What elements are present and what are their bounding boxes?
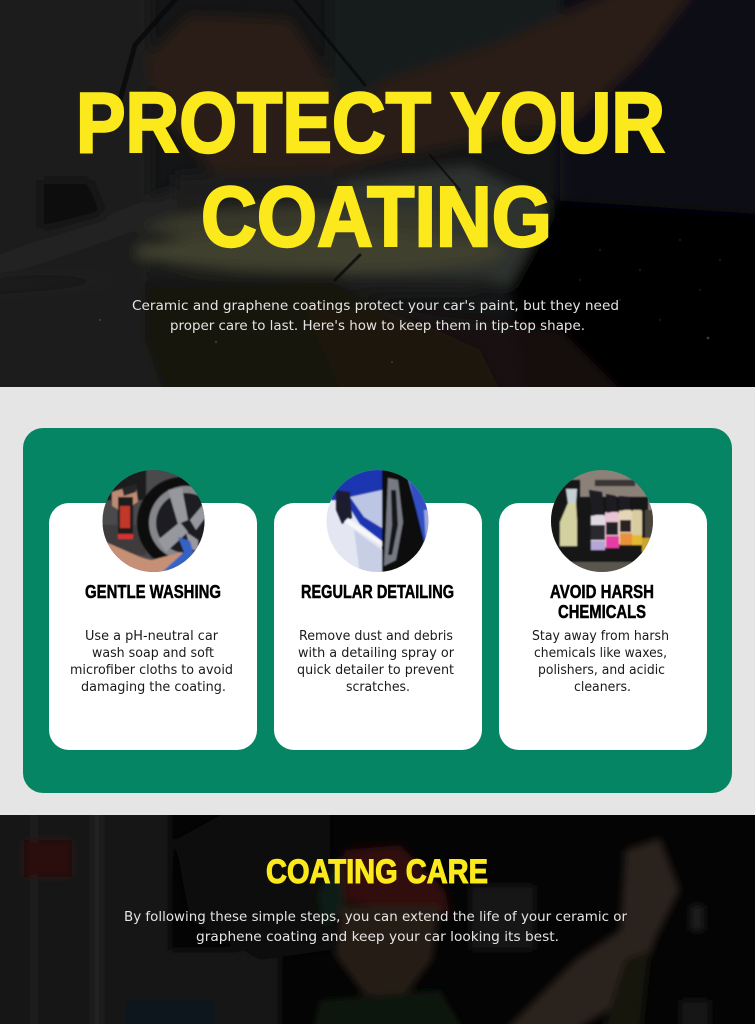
card text <box>297 629 455 695</box>
photo: blue car and tyre <box>326 465 432 574</box>
main title: COATING <box>201 170 552 265</box>
card text: quick detailer to prevent <box>297 663 454 678</box>
card text: with a detailing spray or <box>298 646 455 661</box>
card text: Stay away from harsh <box>532 629 669 644</box>
card heading <box>550 581 654 622</box>
card heading: GENTLE WASHING <box>85 581 221 602</box>
hero intro text: Ceramic and graphene coatings protect your car's paint, but they need <box>132 298 619 314</box>
footer heading: COATING CARE <box>266 853 488 891</box>
card text: wash soap and soft <box>92 646 214 661</box>
card text: Use a pH-neutral car <box>85 629 219 644</box>
card text <box>70 629 233 695</box>
card: gentle washing <box>49 466 257 750</box>
card: avoid harsh chemicals <box>499 468 707 750</box>
card text: scratches. <box>346 680 410 695</box>
panel: green tips container <box>23 428 732 793</box>
card text: damaging the coating. <box>81 680 226 695</box>
card heading: AVOID HARSH <box>550 581 654 602</box>
footer background photo: mechanic <box>0 795 755 1024</box>
card: regular detailing <box>274 465 482 750</box>
hero section <box>0 0 755 410</box>
photo: washing a wheel <box>102 470 204 572</box>
card text: polishers, and acidic <box>538 663 665 678</box>
card text: chemicals like waxes, <box>534 646 667 661</box>
card text: cleaners. <box>574 680 631 695</box>
light grey middle band <box>0 387 755 815</box>
footer text: graphene coating and keep your car looking its best. <box>196 929 559 945</box>
card text: Remove dust and debris <box>299 629 453 644</box>
card heading: REGULAR DETAILING <box>301 581 454 602</box>
footer text: By following these simple steps, you can extend the life of your ceramic or <box>124 909 627 925</box>
main title: PROTECT YOUR <box>76 76 665 171</box>
hero intro text <box>132 298 619 334</box>
hero intro text: proper care to last. Here's how to keep them in tip-top shape. <box>170 318 585 334</box>
footer text <box>124 909 627 945</box>
footer section <box>0 795 755 1024</box>
card heading: CHEMICALS <box>558 601 646 622</box>
hero background photo: hands polishing car <box>0 0 755 410</box>
photo: row of detailing bottles <box>551 470 653 572</box>
card text <box>532 629 669 695</box>
card text: microfiber cloths to avoid <box>70 663 233 678</box>
main title <box>76 76 665 265</box>
